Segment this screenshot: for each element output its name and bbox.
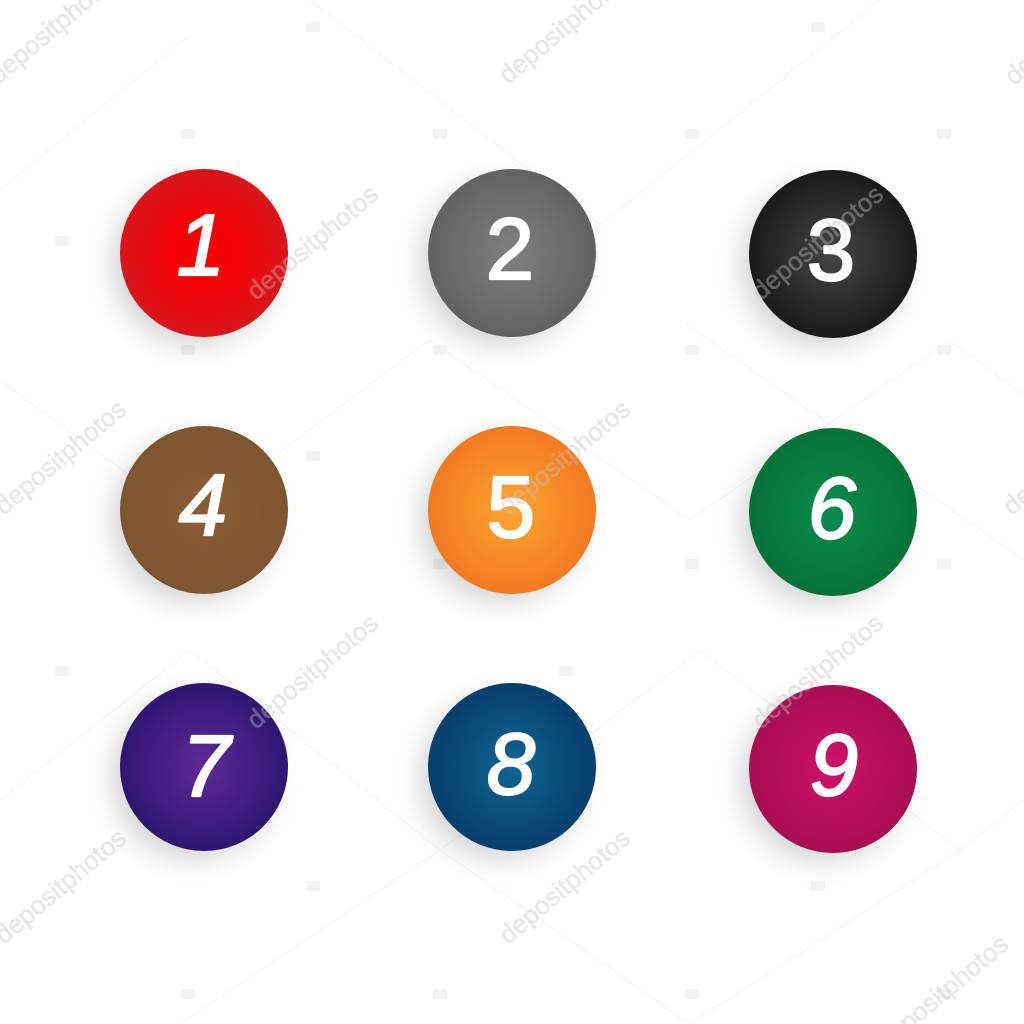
badge 5: orange (428, 426, 596, 594)
badge 5: orange: 5 (487, 459, 535, 556)
badge 9: magenta (749, 685, 917, 853)
watermark text group: depositphotos (493, 823, 636, 950)
watermark text group: depositphotos (493, 394, 636, 521)
watermark text group: depositphotos (746, 608, 889, 735)
badge 2: gray (428, 169, 596, 337)
badge 7: purple: 7 (182, 718, 234, 815)
badge 2: gray: 2 (486, 201, 534, 298)
badge 1: red: 1 (177, 197, 225, 294)
badge 8: blue (428, 683, 596, 851)
watermark text group: depositphotos (241, 179, 384, 306)
badge 6: green (749, 428, 917, 596)
badge 8: blue: 8 (487, 716, 535, 813)
badge 9: magenta: 9 (810, 717, 858, 814)
badge 4: brown (120, 426, 288, 594)
badge 1: red (120, 169, 288, 337)
badge 3: black (749, 170, 917, 338)
watermark text group: depositphotos (241, 608, 384, 735)
badge 6: green: 6 (808, 460, 857, 557)
watermark text group: depositphotos (746, 179, 889, 306)
shadow group: soft shadows under circles (111, 182, 904, 862)
badge 3: black: 3 (807, 202, 855, 299)
badge 4: brown: 4 (179, 457, 227, 554)
badge 7: purple (120, 683, 288, 851)
